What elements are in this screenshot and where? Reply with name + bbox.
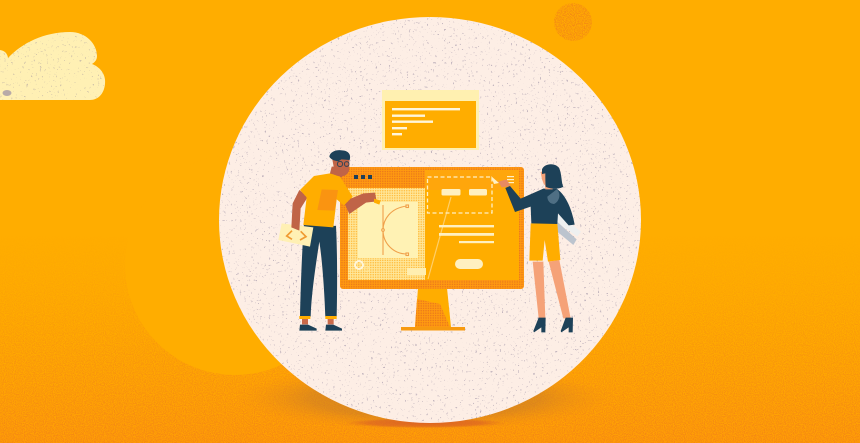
speckled spot bbox=[554, 3, 592, 41]
ground shadow bbox=[235, 365, 615, 431]
card text lines bbox=[392, 108, 460, 135]
cloud bbox=[0, 32, 106, 100]
man's head bbox=[332, 157, 349, 176]
man's ankles bbox=[302, 319, 334, 324]
monitor bbox=[340, 167, 524, 330]
woman's boots bbox=[533, 318, 573, 332]
light beam bbox=[428, 197, 451, 279]
man's right arm bbox=[343, 193, 377, 214]
monitor stand bbox=[401, 288, 465, 330]
man's glasses bbox=[337, 161, 349, 167]
submit pill bbox=[455, 259, 483, 269]
cursor bbox=[491, 176, 499, 184]
dashed selection bbox=[428, 177, 492, 213]
woman's torso and arm bbox=[505, 186, 575, 225]
man's shirt bbox=[300, 173, 353, 227]
monitor frame bbox=[340, 167, 524, 289]
man's neck bbox=[329, 167, 344, 177]
gear icon bbox=[355, 261, 370, 272]
man's trousers bbox=[300, 223, 337, 317]
monitor artboard bbox=[358, 202, 418, 258]
woman bbox=[498, 164, 581, 332]
shirt pocket texture bbox=[317, 189, 338, 211]
sweater texture bbox=[547, 189, 559, 204]
man's paper bbox=[278, 223, 313, 247]
woman's shorts bbox=[529, 223, 560, 262]
woman's legs bbox=[533, 260, 571, 318]
man's shoes bbox=[299, 325, 342, 331]
small label bbox=[407, 268, 426, 275]
code icon on paper bbox=[287, 231, 306, 240]
floating window card bbox=[382, 90, 479, 150]
man bbox=[278, 150, 381, 331]
central circle bbox=[219, 17, 641, 423]
man's fingers on curve bbox=[374, 199, 381, 205]
man's left arm bbox=[291, 190, 308, 231]
monitor screen right bbox=[420, 188, 519, 280]
man's hair bbox=[329, 150, 350, 161]
buttons bbox=[442, 189, 460, 196]
form lines bbox=[439, 225, 494, 243]
monitor screen left panel bbox=[348, 188, 425, 280]
ground grain bbox=[0, 289, 860, 443]
woman's hand bbox=[498, 179, 511, 187]
window dots bbox=[354, 175, 372, 179]
bezier curve tool bbox=[382, 205, 408, 256]
background blob bbox=[125, 155, 345, 375]
man's cuffs bbox=[299, 316, 337, 319]
woman's neck bbox=[545, 182, 553, 189]
circle speckle texture bbox=[219, 17, 641, 423]
woman's hair bbox=[542, 164, 563, 189]
blueprint rolls bbox=[556, 213, 581, 245]
woman's face bbox=[541, 170, 547, 185]
menu lines bbox=[507, 176, 514, 183]
